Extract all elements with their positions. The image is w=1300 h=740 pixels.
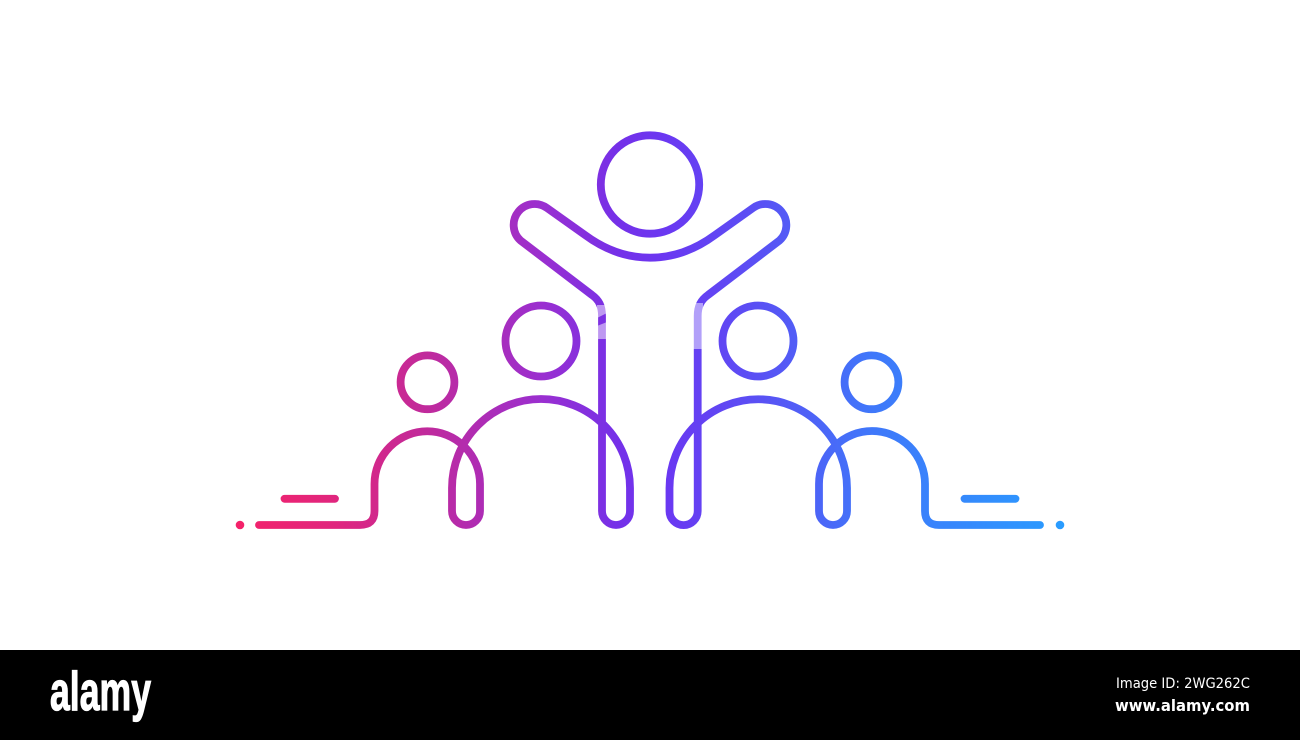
head: central leader [601,135,699,234]
website url: www.alamy.com [1115,696,1250,715]
head: outer right person [845,355,898,409]
head: inner left person [506,306,576,376]
watermark trace on left vertical [597,305,607,339]
watermark trace on right vertical [693,303,703,349]
dot: left accent [236,521,244,529]
dash: right accent [964,495,1016,503]
icon: group of people with raised-arm leader [259,135,1040,525]
dash: left accent [284,495,335,503]
image id: Image ID: 2WG262C [1116,676,1250,692]
logo: alamy: alamy [50,660,151,722]
head: outer left person [401,355,454,409]
dot: right accent [1056,521,1064,529]
body outline: continuous line through all figures [259,204,1040,525]
head: inner right person [722,306,794,376]
footer bar [0,650,1300,740]
